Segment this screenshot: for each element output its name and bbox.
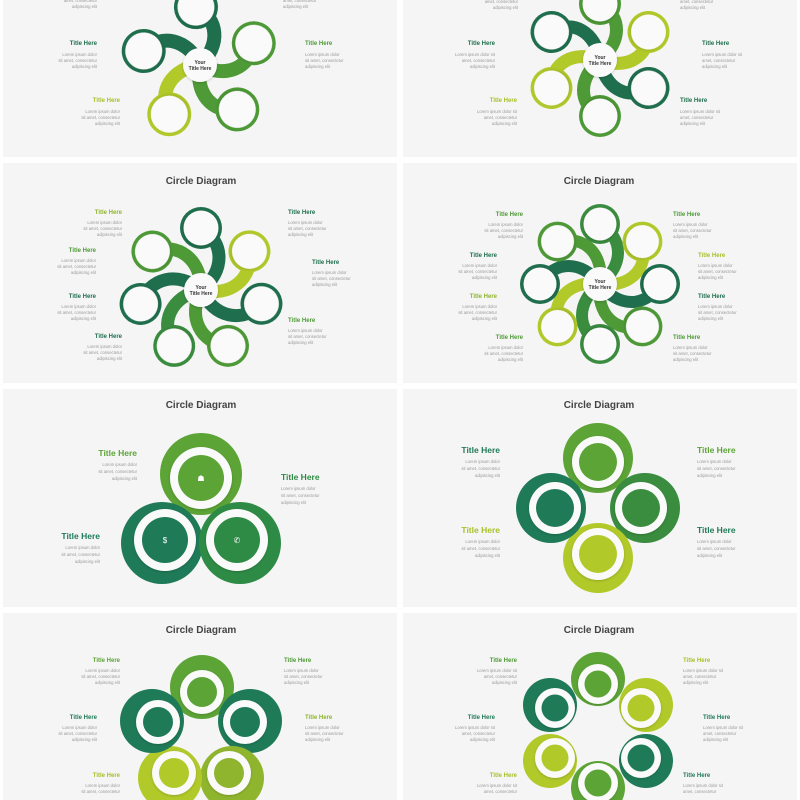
text blocks panel 3 bbox=[57, 210, 351, 361]
text blocks panel 4 bbox=[458, 212, 737, 362]
text blocks panel 2: adipiscing elit bbox=[493, 5, 519, 10]
text blocks panel 5: sit amet, consectetur bbox=[61, 552, 101, 557]
text blocks panel 8: Lorem ipsum dolor sit bbox=[477, 783, 518, 788]
text blocks panel 4: sit amet, consectetur bbox=[673, 228, 712, 233]
text blocks panel 4: Title Here bbox=[496, 212, 524, 218]
text blocks panel 4: sit amet, consectetur bbox=[484, 228, 524, 233]
text blocks panel 2: amet, consectetur bbox=[680, 115, 714, 120]
text blocks panel 6: Lorem ipsum dolor bbox=[697, 539, 732, 544]
text blocks panel 4: adipiscing elit bbox=[498, 234, 524, 239]
text blocks panel 4: Lorem ipsum dolor bbox=[462, 304, 498, 309]
heading panel 8: Circle Diagram bbox=[564, 625, 634, 636]
text blocks panel 3: adipiscing elit bbox=[288, 232, 314, 237]
text blocks panel 1 bbox=[58, 0, 344, 126]
text blocks panel 2: adipiscing elit bbox=[470, 64, 496, 69]
text blocks panel 8: amet, consectetur bbox=[462, 731, 496, 736]
text blocks panel 4: Title Here bbox=[470, 253, 498, 259]
text blocks panel 4: adipiscing elit bbox=[673, 357, 699, 362]
text blocks panel 7: sit amet, consectetur bbox=[81, 789, 121, 794]
text blocks panel 1: adipiscing elit bbox=[283, 4, 309, 9]
swirl diagram 1 bbox=[117, 0, 282, 145]
text blocks panel 4: sit amet, consectetur bbox=[458, 269, 498, 274]
text blocks panel 7: sit amet, consectetur bbox=[58, 731, 98, 736]
five-circle ring diagram bbox=[120, 655, 282, 800]
text blocks panel 2: Lorem ipsum dolor sit bbox=[477, 109, 518, 114]
text blocks panel 8: adipiscing elit bbox=[683, 680, 709, 685]
text blocks panel 3: sit amet, consectetur bbox=[83, 350, 123, 355]
text blocks panel 2 bbox=[455, 0, 743, 126]
text blocks panel 1: sit amet, consectetur bbox=[58, 58, 98, 63]
swirl diagram 1: Title Here bbox=[189, 66, 212, 72]
text blocks panel 8: adipiscing elit bbox=[492, 680, 518, 685]
text blocks panel 2: adipiscing elit bbox=[702, 64, 728, 69]
text blocks panel 8: amet, consectetur bbox=[484, 674, 518, 679]
text blocks panel 7: adipiscing elit bbox=[95, 680, 121, 685]
text blocks panel 8: adipiscing elit bbox=[470, 737, 496, 742]
text blocks panel 2: Lorem ipsum dolor sit bbox=[680, 109, 721, 114]
text blocks panel 2: amet, consectetur bbox=[462, 58, 496, 63]
text blocks panel 1: Lorem ipsum dolor bbox=[305, 52, 340, 57]
text blocks panel 3: adipiscing elit bbox=[97, 356, 123, 361]
text blocks panel 3: Lorem ipsum dolor bbox=[288, 220, 323, 225]
text blocks panel 8: Lorem ipsum dolor sit bbox=[477, 668, 518, 673]
text blocks panel 6: Title Here bbox=[461, 525, 500, 535]
text blocks panel 2: amet, consectetur bbox=[484, 115, 518, 120]
text blocks panel 2: Title Here bbox=[468, 41, 496, 47]
six-circle ring diagram bbox=[523, 652, 673, 800]
swirl diagram 4 bbox=[520, 204, 680, 364]
text blocks panel 7: Lorem ipsum dolor bbox=[284, 668, 319, 673]
text blocks panel 5: adipiscing elit bbox=[281, 500, 307, 505]
text blocks panel 4: Title Here bbox=[673, 212, 701, 218]
text blocks panel 8: Title Here bbox=[683, 773, 711, 779]
text blocks panel 5: Lorem ipsum dolor bbox=[65, 545, 101, 550]
text blocks panel 5: Lorem ipsum dolor bbox=[102, 462, 138, 467]
panel 6: four circles bbox=[461, 400, 736, 593]
text blocks panel 7: adipiscing elit bbox=[305, 737, 331, 742]
text blocks panel 8: Lorem ipsum dolor sit bbox=[683, 668, 724, 673]
text blocks panel 3: adipiscing elit bbox=[97, 232, 123, 237]
text blocks panel 1: Title Here bbox=[305, 41, 333, 47]
text blocks panel 4: adipiscing elit bbox=[698, 316, 724, 321]
text blocks panel 6: sit amet, consectetur bbox=[461, 546, 501, 551]
text blocks panel 5: Lorem ipsum dolor bbox=[281, 486, 316, 491]
text blocks panel 7: sit amet, consectetur bbox=[81, 674, 121, 679]
text blocks panel 3: Lorem ipsum dolor bbox=[87, 220, 123, 225]
text blocks panel 1: sit amet, consectetur bbox=[305, 58, 344, 63]
text blocks panel 4: adipiscing elit bbox=[472, 316, 498, 321]
text blocks panel 1: Title Here bbox=[70, 41, 98, 47]
text blocks panel 6: Lorem ipsum dolor bbox=[465, 539, 501, 544]
text blocks panel 1: Lorem ipsum dolor bbox=[85, 109, 121, 114]
swirl diagram 2: Title Here bbox=[589, 61, 612, 67]
text blocks panel 1: adipiscing elit bbox=[72, 64, 98, 69]
text blocks panel 5: adipiscing elit bbox=[112, 476, 138, 481]
text blocks panel 2: adipiscing elit bbox=[680, 121, 706, 126]
text blocks panel 5: sit amet, consectetur bbox=[281, 493, 320, 498]
text blocks panel 8: amet, consectetur bbox=[703, 731, 737, 736]
text blocks panel 3: Title Here bbox=[288, 318, 316, 324]
text blocks panel 2: Title Here bbox=[490, 98, 518, 104]
text blocks panel 5: Title Here bbox=[98, 448, 137, 458]
text blocks panel 2: Lorem ipsum dolor sit bbox=[455, 52, 496, 57]
text blocks panel 2: Title Here bbox=[680, 98, 708, 104]
text blocks panel 7: Lorem ipsum dolor bbox=[85, 783, 121, 788]
text blocks panel 8: amet, consectetur bbox=[683, 674, 717, 679]
text blocks panel 6: adipiscing elit bbox=[697, 553, 723, 558]
text blocks panel 7: Lorem ipsum dolor bbox=[85, 668, 121, 673]
text blocks panel 3: adipiscing elit bbox=[71, 316, 97, 321]
text blocks panel 7: adipiscing elit bbox=[284, 680, 310, 685]
text blocks panel 7: Title Here bbox=[93, 658, 121, 664]
text blocks panel 3: adipiscing elit bbox=[312, 282, 338, 287]
text blocks panel 6 bbox=[461, 445, 736, 558]
text blocks panel 4: sit amet, consectetur bbox=[698, 269, 737, 274]
text blocks panel 8 bbox=[455, 658, 744, 794]
text blocks panel 8: amet, consectetur bbox=[484, 789, 518, 794]
swirl diagram 4: Your bbox=[594, 279, 606, 285]
text blocks panel 5: Title Here bbox=[61, 531, 100, 541]
swirl diagram 2 bbox=[523, 0, 677, 137]
swirl diagram 3: Your bbox=[195, 285, 207, 291]
text blocks panel 8: Title Here bbox=[490, 773, 518, 779]
text blocks panel 8: amet, consectetur bbox=[683, 789, 717, 794]
text blocks panel 1: adipiscing elit bbox=[305, 64, 331, 69]
text blocks panel 6: Title Here bbox=[697, 445, 736, 455]
text blocks panel 2: amet, consectetur bbox=[702, 58, 736, 63]
text blocks panel 7: sit amet, consectetur bbox=[305, 731, 344, 736]
text blocks panel 4: sit amet, consectetur bbox=[698, 310, 737, 315]
text blocks panel 3: Lorem ipsum dolor bbox=[87, 344, 123, 349]
heading panel 3: Circle Diagram bbox=[166, 176, 236, 187]
text blocks panel 4: Title Here bbox=[496, 335, 524, 341]
text blocks panel 4: sit amet, consectetur bbox=[484, 351, 524, 356]
text blocks panel 4: Lorem ipsum dolor bbox=[488, 345, 524, 350]
swirl diagram 3: Title Here bbox=[190, 291, 213, 297]
text blocks panel 8: Title Here bbox=[490, 658, 518, 664]
text blocks panel 6: adipiscing elit bbox=[475, 553, 501, 558]
text blocks panel 7: Title Here bbox=[284, 658, 312, 664]
three-circle diagram: ☗ bbox=[197, 474, 205, 483]
text blocks panel 5: sit amet, consectetur bbox=[98, 469, 138, 474]
text blocks panel 6: Lorem ipsum dolor bbox=[697, 459, 732, 464]
text blocks panel 4: Lorem ipsum dolor bbox=[488, 222, 524, 227]
text blocks panel 3: Title Here bbox=[69, 248, 97, 254]
text blocks panel 2: Title Here bbox=[702, 41, 730, 47]
text blocks panel 1: Title Here bbox=[93, 98, 121, 104]
heading panel 4: Circle Diagram bbox=[564, 176, 634, 187]
text blocks panel 3: Lorem ipsum dolor bbox=[61, 304, 97, 309]
text blocks panel 7: Title Here bbox=[93, 773, 121, 779]
text blocks panel 1: adipiscing elit bbox=[72, 4, 98, 9]
panel 3: seven-petal swirl bbox=[57, 176, 351, 374]
three-circle diagram: ✆ bbox=[234, 536, 241, 545]
text blocks panel 8: Lorem ipsum dolor sit bbox=[703, 725, 744, 730]
text blocks panel 4: Lorem ipsum dolor bbox=[673, 345, 708, 350]
heading panel 6: Circle Diagram bbox=[564, 400, 634, 411]
text blocks panel 4: adipiscing elit bbox=[498, 357, 524, 362]
text blocks panel 3: Title Here bbox=[312, 260, 340, 266]
text blocks panel 6: Lorem ipsum dolor bbox=[465, 459, 501, 464]
text blocks panel 7: Title Here bbox=[305, 715, 333, 721]
text blocks panel 8: Title Here bbox=[468, 715, 496, 721]
text blocks panel 7: adipiscing elit bbox=[72, 737, 98, 742]
text blocks panel 6: sit amet, consectetur bbox=[697, 466, 736, 471]
text blocks panel 2: adipiscing elit bbox=[492, 121, 518, 126]
heading panel 7: Circle Diagram bbox=[166, 625, 236, 636]
text blocks panel 8: adipiscing elit bbox=[703, 737, 729, 742]
text blocks panel 4: sit amet, consectetur bbox=[458, 310, 498, 315]
panel 7: five circles ring bbox=[58, 625, 344, 800]
text blocks panel 1: adipiscing elit bbox=[95, 121, 121, 126]
text blocks panel 8: Lorem ipsum dolor sit bbox=[455, 725, 496, 730]
text blocks panel 6: Title Here bbox=[697, 525, 736, 535]
text blocks panel 3: sit amet, consectetur bbox=[312, 276, 351, 281]
text blocks panel 6: adipiscing elit bbox=[697, 473, 723, 478]
text blocks panel 6: sit amet, consectetur bbox=[697, 546, 736, 551]
text blocks panel 3: adipiscing elit bbox=[71, 270, 97, 275]
text blocks panel 7: Lorem ipsum dolor bbox=[305, 725, 340, 730]
panel 2: six-petal swirl bbox=[455, 0, 743, 137]
text blocks panel 1: sit amet, consectetur bbox=[81, 115, 121, 120]
text blocks panel 4: Title Here bbox=[470, 294, 498, 300]
text blocks panel 3: sit amet, consectetur bbox=[83, 226, 123, 231]
text blocks panel 7: Lorem ipsum dolor bbox=[62, 725, 98, 730]
panel 4: eight-petal swirl bbox=[458, 176, 737, 364]
text blocks panel 4: Lorem ipsum dolor bbox=[673, 222, 708, 227]
swirl diagram 3 bbox=[115, 207, 287, 374]
text blocks panel 4: Lorem ipsum dolor bbox=[698, 304, 733, 309]
text blocks panel 2: Lorem ipsum dolor sit bbox=[702, 52, 743, 57]
text blocks panel 4: adipiscing elit bbox=[698, 275, 724, 280]
four-circle diagram bbox=[516, 423, 680, 593]
text blocks panel 7 bbox=[58, 658, 344, 794]
swirl diagram 2: Your bbox=[594, 55, 606, 61]
text blocks panel 5: Title Here bbox=[281, 472, 320, 482]
text blocks panel 3: sit amet, consectetur bbox=[288, 334, 327, 339]
three-circle diagram bbox=[121, 433, 281, 584]
text blocks panel 8: Title Here bbox=[703, 715, 731, 721]
text blocks panel 3: Title Here bbox=[95, 210, 123, 216]
panel 1: five-petal swirl bbox=[58, 0, 344, 145]
text blocks panel 3: adipiscing elit bbox=[288, 340, 314, 345]
text blocks panel 8: Lorem ipsum dolor sit bbox=[683, 783, 724, 788]
text blocks panel 3: sit amet, consectetur bbox=[57, 310, 97, 315]
text blocks panel 3: Title Here bbox=[288, 210, 316, 216]
swirl diagram 1: Your bbox=[194, 60, 206, 66]
heading panel 5: Circle Diagram bbox=[166, 400, 236, 411]
text blocks panel 4: Title Here bbox=[698, 253, 726, 259]
text blocks panel 3: sit amet, consectetur bbox=[288, 226, 327, 231]
text blocks panel 3: Lorem ipsum dolor bbox=[312, 270, 347, 275]
text blocks panel 4: Lorem ipsum dolor bbox=[462, 263, 498, 268]
text blocks panel 4: adipiscing elit bbox=[472, 275, 498, 280]
text blocks panel 4: Title Here bbox=[673, 335, 701, 341]
text blocks panel 8: Title Here bbox=[683, 658, 711, 664]
text blocks panel 6: Title Here bbox=[461, 445, 500, 455]
text blocks panel 6: adipiscing elit bbox=[475, 473, 501, 478]
text blocks panel 4: Title Here bbox=[698, 294, 726, 300]
text blocks panel 5 bbox=[61, 448, 320, 564]
swirl diagram 4: Title Here bbox=[589, 285, 612, 291]
panel 5: three circles bbox=[61, 400, 320, 584]
three-circle diagram: $ bbox=[163, 536, 168, 545]
text blocks panel 4: Lorem ipsum dolor bbox=[698, 263, 733, 268]
text blocks panel 1: Lorem ipsum dolor bbox=[62, 52, 98, 57]
text blocks panel 4: sit amet, consectetur bbox=[673, 351, 712, 356]
panel 8: six circles ring bbox=[455, 625, 744, 800]
text blocks panel 3: Lorem ipsum dolor bbox=[61, 258, 97, 263]
text blocks panel 3: Lorem ipsum dolor bbox=[288, 328, 323, 333]
text blocks panel 3: Title Here bbox=[69, 294, 97, 300]
text blocks panel 7: Title Here bbox=[70, 715, 98, 721]
text blocks panel 5: adipiscing elit bbox=[75, 559, 101, 564]
text blocks panel 3: Title Here bbox=[95, 334, 123, 340]
text blocks panel 3: sit amet, consectetur bbox=[57, 264, 97, 269]
text blocks panel 7: sit amet, consectetur bbox=[284, 674, 323, 679]
text blocks panel 4: adipiscing elit bbox=[673, 234, 699, 239]
text blocks panel 2: adipiscing elit bbox=[680, 5, 706, 10]
text blocks panel 6: sit amet, consectetur bbox=[461, 466, 501, 471]
